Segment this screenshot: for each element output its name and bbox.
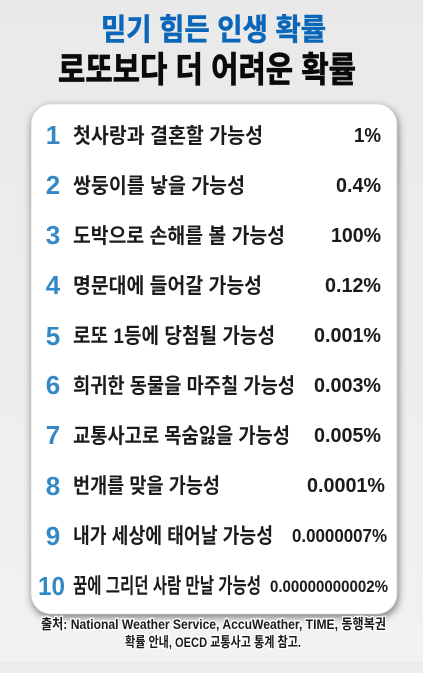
row 3: 100% <box>331 225 381 247</box>
source note: 확률 안내, OECD 교통사고 통계 참고. <box>125 634 301 650</box>
row 5: 0.001% <box>314 325 381 347</box>
row 9 <box>46 521 387 551</box>
title: black headline: 로또보다 더 어려운 확률 <box>58 51 356 90</box>
row 10: 10 <box>38 571 65 601</box>
row 6 <box>46 370 381 400</box>
row 1 <box>46 120 381 150</box>
row 9: 9 <box>46 521 60 551</box>
row 7 <box>46 420 381 450</box>
row 10: 0.00000000002% <box>270 577 388 596</box>
row 2: 쌍둥이를 낳을 가능성 <box>73 175 245 198</box>
row 3: 도박으로 손해를 볼 가능성 <box>73 225 285 248</box>
row 8: 번개를 맞을 가능성 <box>73 475 220 498</box>
row 3: 3 <box>46 220 60 250</box>
row 7: 교통사고로 목숨잃을 가능성 <box>73 425 290 448</box>
row 4 <box>46 270 381 300</box>
row 8: 0.0001% <box>307 475 385 497</box>
row 3 <box>46 220 381 250</box>
row 5 <box>46 321 381 351</box>
row 7: 7 <box>46 420 60 450</box>
row 8: 8 <box>46 471 60 501</box>
title: blue headline: 믿기 힘든 인생 확률 <box>101 14 326 47</box>
row 4: 4 <box>46 270 61 300</box>
row 2 <box>46 170 381 200</box>
row 2: 2 <box>46 170 60 200</box>
row 6: 희귀한 동물을 마주칠 가능성 <box>73 375 295 398</box>
row 4: 0.12% <box>325 275 381 297</box>
row 7: 0.005% <box>314 425 381 447</box>
row 4: 명문대에 들어갈 가능성 <box>73 275 262 298</box>
panel: probability list <box>31 104 397 614</box>
row 1: 첫사랑과 결혼할 가능성 <box>73 125 263 148</box>
row 5: 로또 1등에 당첨될 가능성 <box>73 325 275 348</box>
row 8 <box>46 471 385 501</box>
row 9: 0.0000007% <box>292 526 387 546</box>
row 10: 꿈에 그리던 사람 만날 가능성 <box>73 575 261 598</box>
row 2: 0.4% <box>336 175 381 197</box>
row 1: 1 <box>46 120 60 150</box>
row 6: 6 <box>46 370 60 400</box>
row 9: 내가 세상에 태어날 가능성 <box>73 525 273 548</box>
row 6: 0.003% <box>314 375 381 397</box>
source note <box>41 616 386 650</box>
row 5: 5 <box>46 321 60 351</box>
row 1: 1% <box>354 125 381 147</box>
row 10 <box>38 571 388 601</box>
